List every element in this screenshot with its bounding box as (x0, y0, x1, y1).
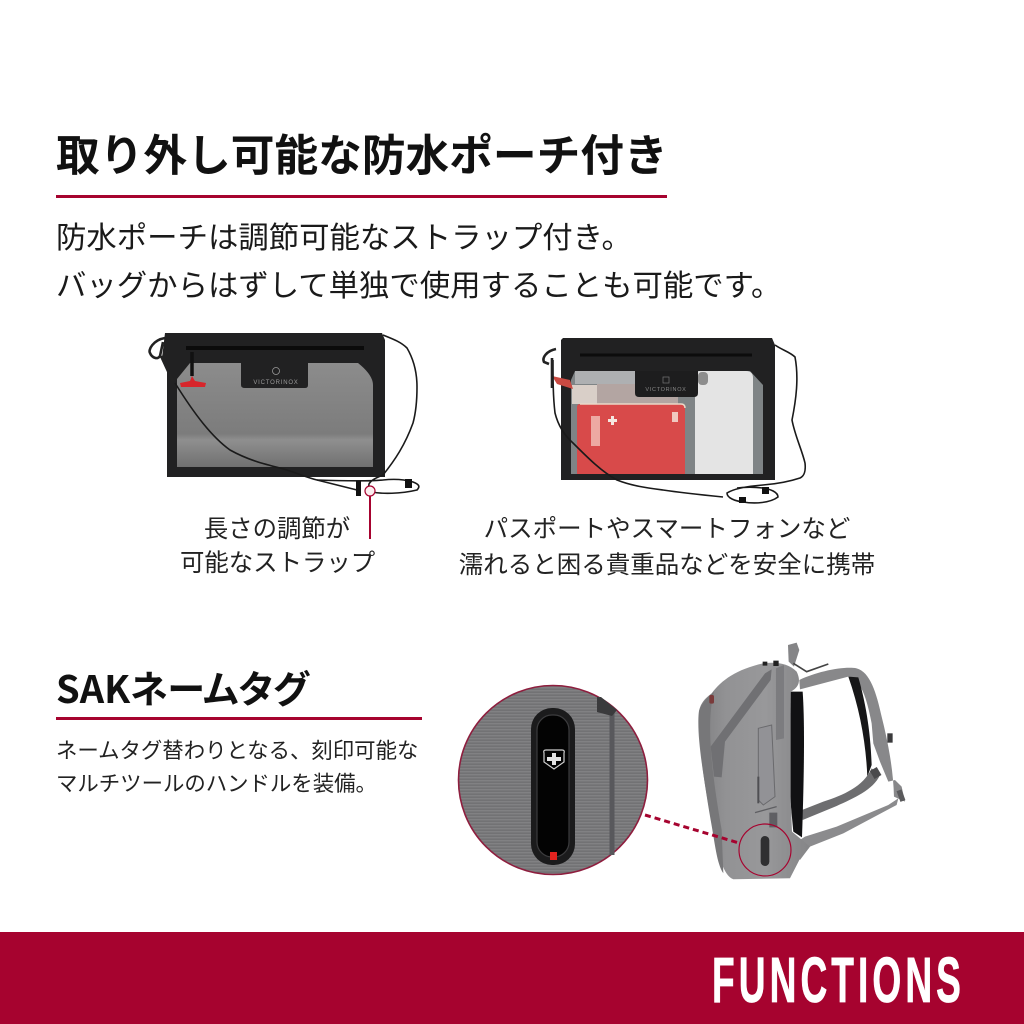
side pocket (758, 725, 775, 805)
dotted connector (645, 815, 739, 843)
caption: passport and smartphone: 濡れると困る貴重品などを安全に携帯 (459, 546, 875, 581)
back panel (790, 692, 804, 837)
text block: name tag description: マルチツールのハンドルを装備。 (56, 767, 377, 798)
heading underline (56, 195, 667, 198)
caption: passport and smartphone: パスポートやスマートフォンなど (484, 510, 850, 545)
strap (175, 383, 357, 490)
shoulder strap (799, 668, 905, 802)
strap (553, 360, 723, 497)
strap seam (610, 708, 614, 855)
logo (272, 368, 280, 374)
text block: pouch description: 防水ポーチは調節可能なストラップ付き。 (56, 213, 632, 257)
shield logo (544, 750, 564, 769)
callout: strap adjuster pointer (365, 486, 375, 539)
footer banner (0, 932, 1024, 1024)
front panel edge (699, 692, 723, 873)
side zipper (776, 665, 784, 740)
text block: pouch description: バッグからはずして単独で使用することも可能です。 (56, 261, 781, 305)
text block: name tag description (56, 734, 418, 798)
top handle (788, 643, 799, 667)
text block: pouch description (56, 213, 781, 305)
tag close-up circle (458, 686, 648, 874)
backpack side view (698, 643, 905, 879)
zipper (186, 346, 364, 350)
diagonal zipper (711, 669, 772, 777)
pouch window (571, 371, 763, 474)
zipper (580, 354, 752, 356)
banner label: FUNCTIONS (712, 946, 965, 1017)
red zipper pull (552, 376, 573, 389)
red zip pull (709, 695, 714, 704)
lower straps (802, 768, 880, 820)
caption: adjustable strap: 可能なストラップ (180, 544, 375, 579)
caption: passport and smartphone (459, 510, 875, 581)
illustration: empty pouch with strap: VICTORINOX (253, 380, 299, 386)
pouch body (162, 333, 385, 477)
smartphone (695, 371, 753, 474)
buckles (887, 733, 893, 743)
red marker (550, 852, 557, 860)
pouch window (177, 363, 373, 467)
heading underline (56, 717, 422, 720)
text block: name tag description: ネームタグ替わりとなる、刻印可能な (56, 734, 418, 765)
caption: adjustable strap: 長さの調節が (204, 510, 350, 545)
highlight circle (739, 824, 791, 876)
passport (577, 404, 685, 474)
illustration: pouch with passport and smartphone (544, 338, 805, 503)
pouch body (561, 338, 775, 480)
illustration: pouch with passport and smartphone: VICTORINOX (645, 387, 687, 393)
red zipper pull (190, 352, 194, 376)
black multitool handle (531, 708, 575, 865)
tab with logo (635, 371, 698, 397)
tag on bag (761, 836, 769, 866)
bag body (698, 663, 810, 879)
heading: waterproof pouch: 取り外し可能な防水ポーチ付き (56, 120, 668, 184)
heading: SAK name tag: SAKネームタグ (56, 659, 309, 714)
caption: adjustable strap (180, 510, 375, 579)
